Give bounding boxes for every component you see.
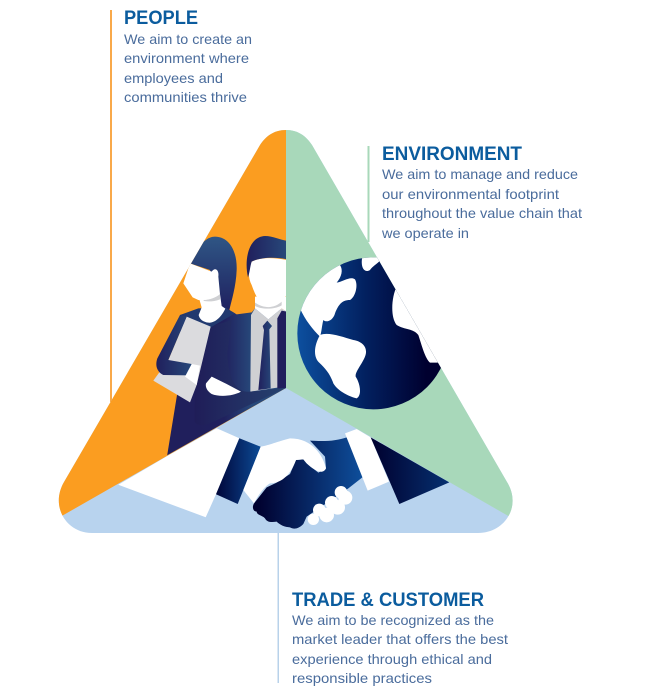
paper (153, 317, 211, 402)
heading: trade and customer: TRADE & CUSTOMER (292, 590, 484, 611)
left cuff (216, 438, 261, 504)
jacket right side (277, 311, 287, 388)
description: trade and customer: We aim to be recognized as the (292, 612, 494, 628)
face (248, 258, 286, 297)
right cuff (345, 429, 389, 491)
description: trade and customer: market leader that offers the best (292, 631, 508, 647)
chin shadow (255, 302, 282, 309)
text block: environment (381, 144, 582, 241)
segment: people (58, 130, 286, 516)
icon: globe (297, 257, 449, 409)
text block: trade and customer (292, 590, 508, 686)
left white sleeve (118, 428, 239, 517)
sleeve (236, 388, 286, 410)
hand: woman (185, 364, 200, 385)
hair: woman (190, 237, 237, 310)
icon: handshake (118, 428, 449, 529)
connector line: trade and customer (278, 532, 279, 683)
description: people: communities thrive (124, 89, 247, 105)
description: environment: We aim to manage and reduce (382, 166, 578, 182)
tie (258, 321, 272, 390)
description: people: employees and (124, 70, 223, 86)
heading: environment: ENVIRONMENT (382, 144, 522, 165)
icon: people (153, 236, 287, 458)
description: trade and customer (292, 612, 508, 686)
heading: people: PEOPLE (124, 8, 198, 29)
triangle diagram (58, 130, 513, 533)
blouse shoulder (180, 307, 235, 327)
arm (156, 315, 192, 375)
fingers (308, 486, 352, 525)
white hand (243, 438, 326, 503)
description: people: environment where (124, 50, 249, 66)
neck and collar (199, 294, 225, 323)
description: environment (381, 166, 582, 241)
connector line: environment (368, 146, 370, 242)
handshake hands (243, 429, 449, 529)
description: trade and customer: experience through ethical and (292, 651, 492, 667)
description: environment: throughout the value chain that (382, 205, 582, 221)
jacket body (167, 307, 287, 458)
face (183, 263, 220, 300)
continent: africa (392, 287, 442, 363)
connector line: people (110, 10, 112, 402)
hand: man (206, 377, 241, 396)
description: environment: we operate in (381, 225, 469, 241)
description: people (124, 31, 252, 105)
neck (255, 297, 287, 319)
continent: north america (301, 265, 356, 336)
hair: man (247, 236, 287, 277)
continent: south america (315, 334, 366, 398)
segment: environment (286, 120, 530, 517)
text block: people (124, 8, 252, 105)
right sleeve (371, 437, 449, 504)
continent: greenland (362, 257, 380, 271)
figure: man (167, 236, 287, 458)
chin shadow (203, 294, 220, 301)
shirt (250, 308, 287, 392)
figure: woman (153, 237, 237, 402)
segment: trade and customer (58, 130, 513, 533)
description: people: We aim to create an (124, 31, 252, 47)
description: trade and customer: responsible practices (292, 670, 432, 686)
dark hand (253, 437, 363, 529)
description: environment: our environmental footprint (382, 186, 559, 202)
